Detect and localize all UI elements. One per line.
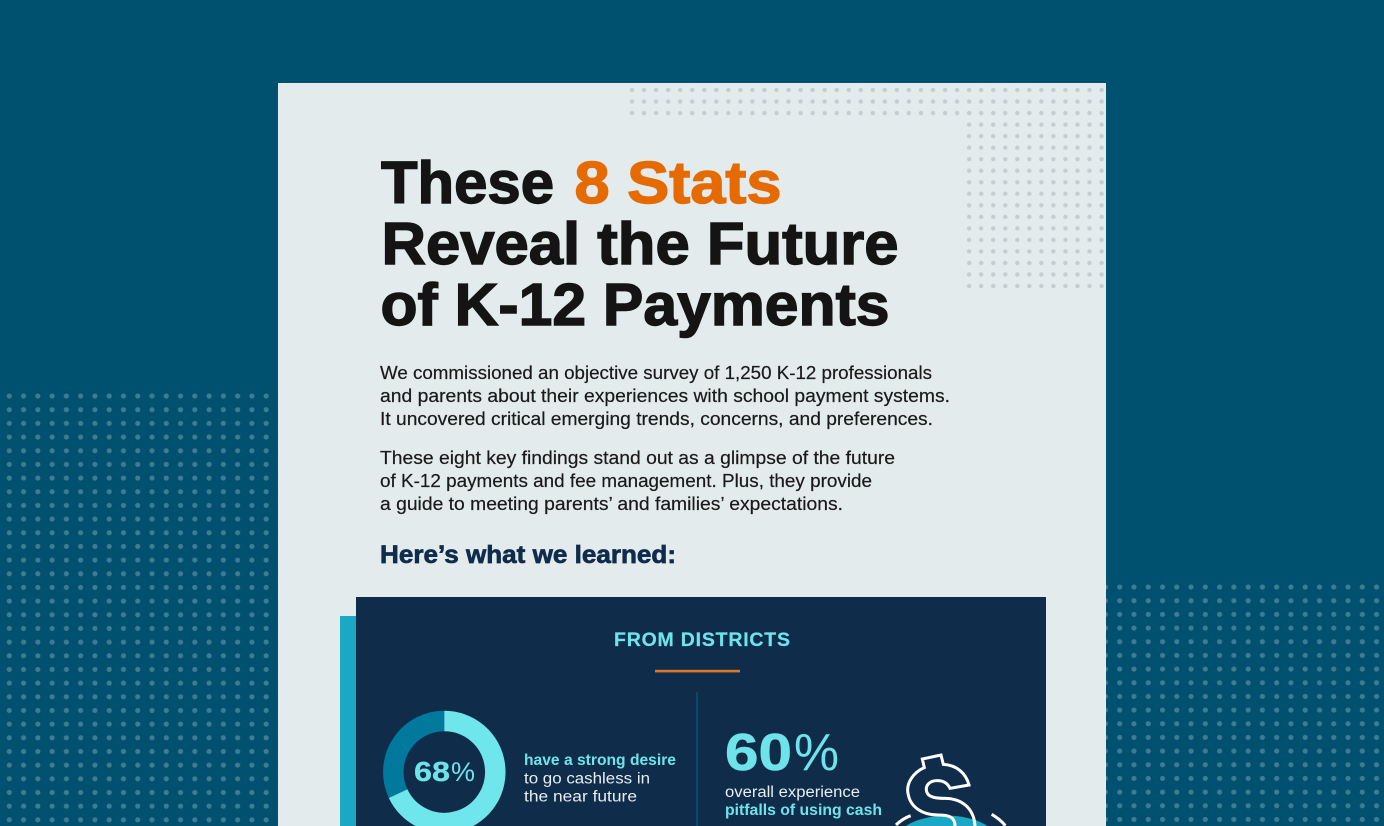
intro paragraph 1: It uncovered critical emerging trends, concerns, and preferences. <box>380 408 933 429</box>
stat text: cashless: to go cashless in <box>524 770 650 788</box>
subheading: Here’s what we learned: <box>380 541 676 569</box>
donut chart: 68%: % <box>451 757 475 787</box>
stat: 60%: overall experience <box>725 784 860 801</box>
title: 8 Stats <box>574 150 782 216</box>
teal accent strip <box>340 616 356 826</box>
intro paragraph 2 <box>380 447 895 514</box>
icon: dollar sign with coins <box>895 755 1005 826</box>
panel: infographic page <box>278 83 1106 826</box>
title: Reveal the Future <box>382 211 898 277</box>
intro paragraph 2: a guide to meeting parents’ and families’ expectations. <box>380 493 843 514</box>
title <box>380 150 898 338</box>
donut chart: 68%: 68 <box>414 756 450 787</box>
stat: 60% <box>726 733 882 818</box>
title: of K-12 Payments <box>380 272 890 338</box>
stat: 60%: 60 <box>725 724 792 782</box>
intro paragraph 1 <box>380 362 950 429</box>
stat text: cashless: the near future <box>524 788 637 806</box>
stat: 60%: pitfalls of using cash <box>725 802 882 819</box>
title: These <box>381 150 554 216</box>
intro paragraph 1: We commissioned an objective survey of 1,250 K-12 professionals <box>380 362 932 383</box>
section heading: FROM DISTRICTS <box>614 629 790 651</box>
heading underline <box>655 670 740 672</box>
stat: 60%: % <box>794 724 839 782</box>
intro paragraph 2: of K-12 payments and fee management. Plus, they provide <box>380 470 872 491</box>
intro paragraph 1: and parents about their experiences with school payment systems. <box>380 385 950 406</box>
donut chart: 68% <box>393 721 495 823</box>
stat text: cashless <box>524 754 676 802</box>
stat text: cashless: have a strong desire <box>524 752 676 769</box>
panel: from districts <box>356 597 1046 826</box>
intro paragraph 2: These eight key findings stand out as a glimpse of the future <box>380 447 895 468</box>
